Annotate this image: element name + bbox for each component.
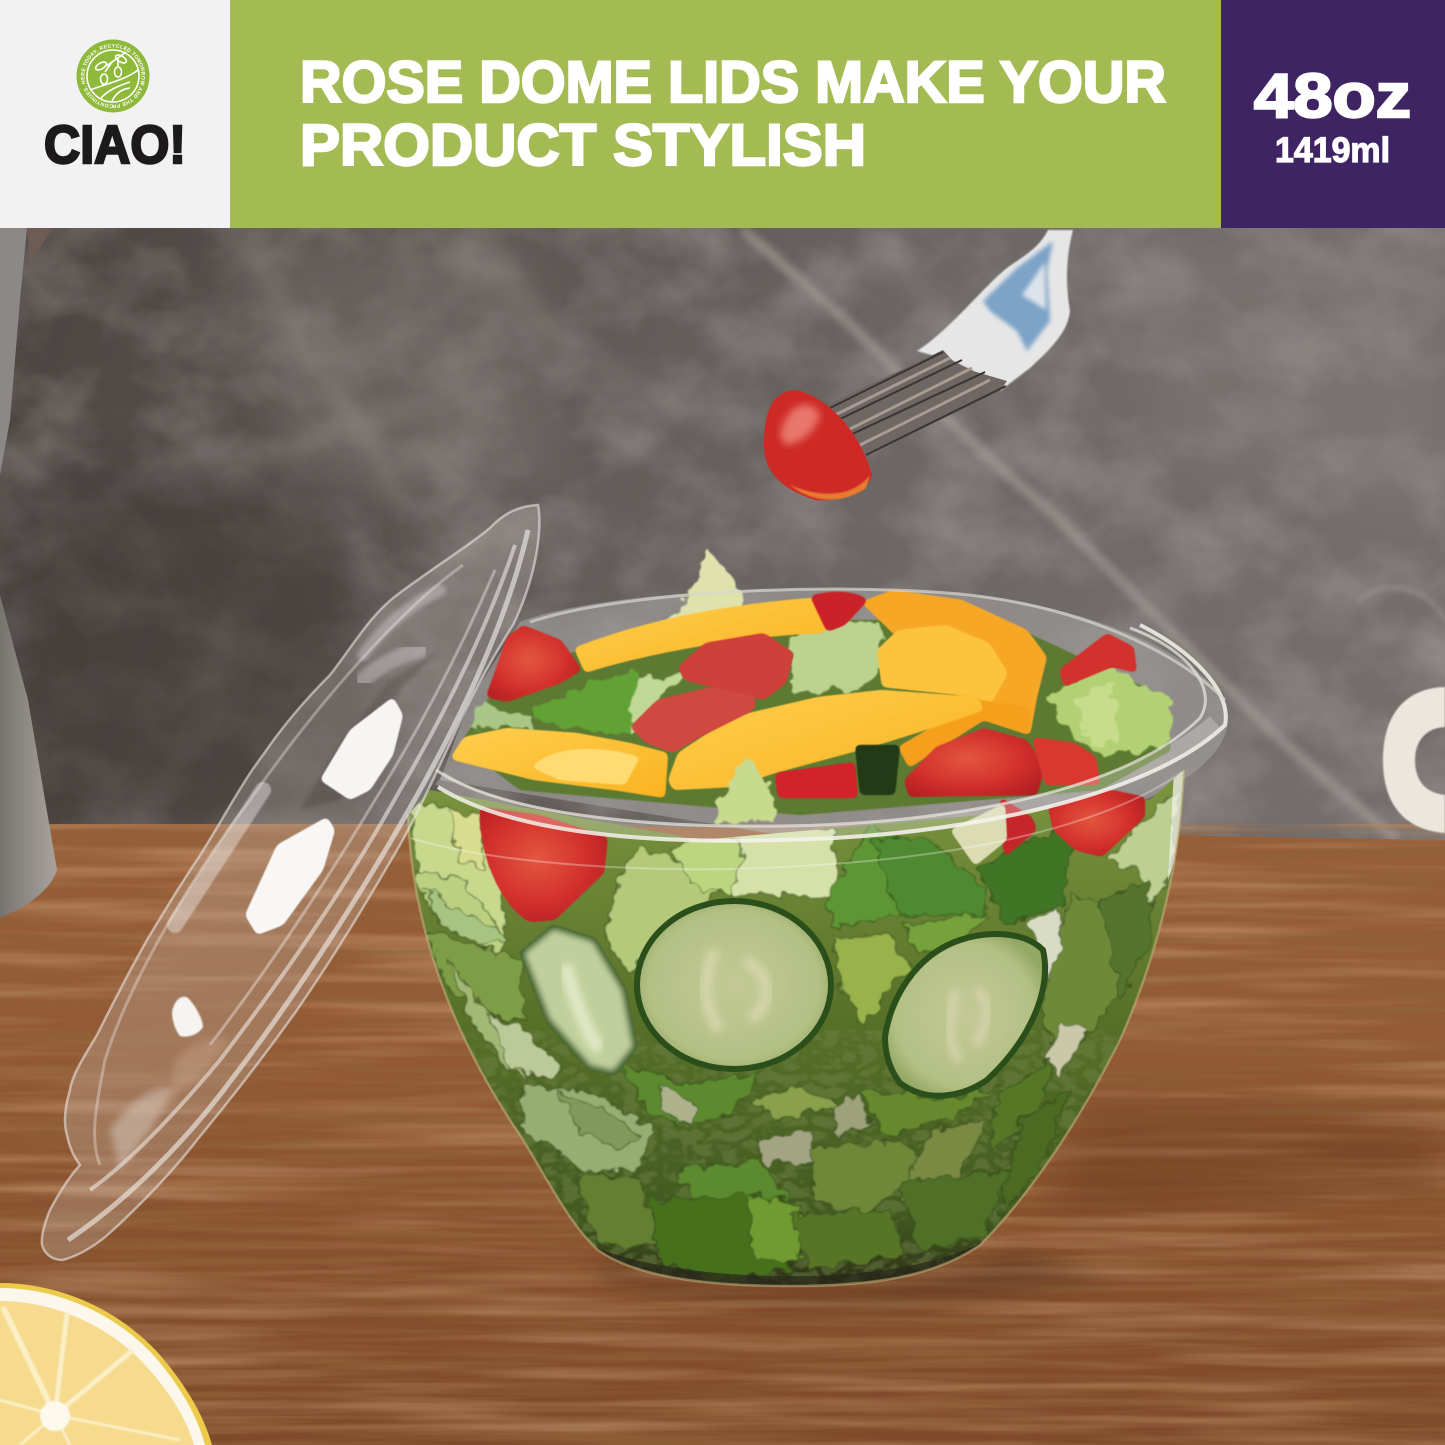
lid dark see-through tint (300, 650, 440, 810)
blue reflection (983, 241, 1053, 351)
lid glass rim lines (68, 530, 528, 1240)
lid (42, 505, 539, 1260)
top of salad (451, 546, 1172, 825)
bowl back rim (440, 589, 1228, 835)
lemon slice (0, 1283, 212, 1445)
fork tines (827, 350, 1007, 455)
headline panel: ROSE DOME LIDS MAKE YOUR (300, 50, 1166, 115)
lid highlights (320, 697, 403, 800)
header bar (0, 0, 1445, 228)
logo wordmark: CIAO! (44, 115, 186, 175)
white mug handle at right edge (1383, 687, 1445, 833)
fork handle (917, 230, 1073, 391)
cucumber slices in bowl (522, 901, 1045, 1096)
capacity panel (1221, 0, 1445, 228)
headline panel (230, 0, 1221, 228)
salad bowl (400, 546, 1228, 1290)
bowl front rim (408, 589, 1226, 1286)
cherry tomato on fork (764, 390, 872, 500)
headline panel: PRODUCT STYLISH (300, 113, 866, 178)
lid body (42, 505, 539, 1260)
metal jug at left edge (0, 228, 57, 918)
photo background: wooden table (0, 824, 1445, 1445)
lettuce body in bowl (400, 767, 1200, 1290)
dark salad base (460, 620, 1172, 815)
upper leaves (470, 617, 1171, 753)
cherry tomatoes (486, 625, 582, 702)
capacity panel: 48oz (1254, 62, 1411, 131)
back lettuce leaf (660, 546, 748, 628)
orange slices (574, 597, 828, 673)
tomatoes seen through bowl wall (480, 790, 1145, 922)
lettuce leaf at centre front (716, 758, 775, 825)
capacity panel: 1419ml (1275, 131, 1390, 170)
logo badge (76, 40, 150, 112)
fork with tomato (764, 230, 1073, 500)
logo panel (0, 0, 230, 228)
photo background: marble wall (0, 228, 1445, 840)
